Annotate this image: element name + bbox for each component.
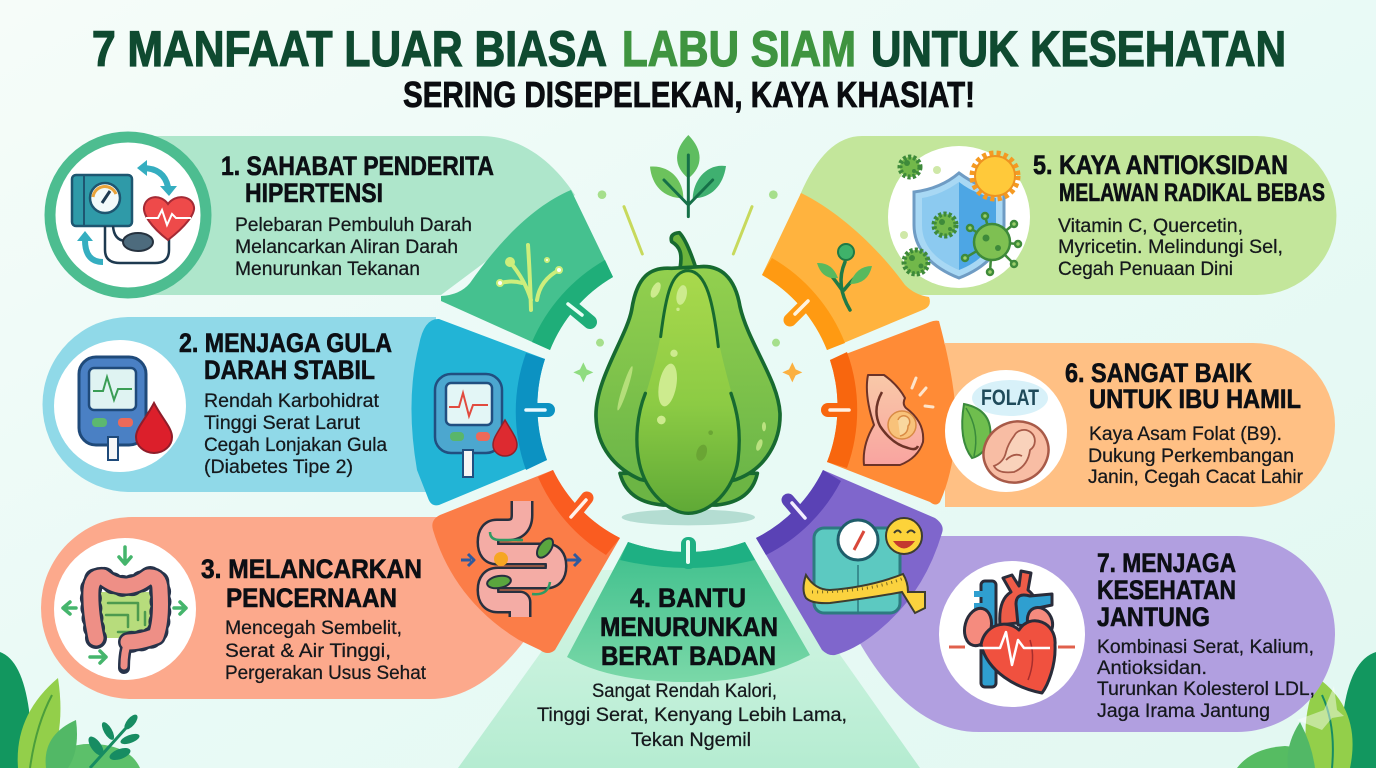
- icon: glucose meter: [79, 357, 172, 460]
- icon: scale and tape: [804, 518, 925, 613]
- body 6: [1088, 424, 1304, 488]
- heading 4: MENURUNKAN: [600, 612, 778, 642]
- panel 2: gula darah: [43, 317, 548, 505]
- body 6: Dukung Perkembangan: [1088, 446, 1294, 467]
- tab: [828, 403, 849, 417]
- pill: [43, 317, 436, 492]
- tab: [790, 301, 808, 320]
- heading 6: 6. SANGAT BAIK: [1065, 358, 1252, 388]
- heading 1: HIPERTENSI: [245, 178, 383, 208]
- body 5: Myricetin. Melindungi Sel,: [1058, 237, 1283, 258]
- icon circle: [54, 340, 186, 472]
- heading 6: [1065, 358, 1301, 414]
- body 7: Jaga Irama Jantung: [1097, 701, 1270, 722]
- icon: sprout with berry: [817, 244, 872, 310]
- heading 1: 1. SAHABAT PENDERITA: [221, 151, 494, 181]
- tab: [526, 403, 548, 417]
- icon: heart: [949, 571, 1075, 693]
- heading 3: PENCERNAAN: [226, 583, 397, 613]
- pill: [41, 517, 525, 699]
- central chayote illustration: [573, 135, 802, 525]
- icon: top sprig: [650, 135, 726, 217]
- icon: sprout: [497, 245, 562, 310]
- body 2: Cegah Lonjakan Gula: [204, 435, 387, 456]
- body 2: Tinggi Serat Larut: [204, 413, 361, 434]
- panel 4: bantu menurunkan berat badan: [458, 537, 920, 768]
- heading 3: 3. MELANCARKAN: [201, 554, 422, 584]
- body 3: Serat & Air Tinggi,: [225, 641, 391, 662]
- body 1: [235, 215, 472, 280]
- wedge: [441, 190, 613, 350]
- title: 7 MANFAAT LUAR BIASA: [92, 21, 607, 77]
- heading 3: [201, 554, 422, 613]
- icon circle: [50, 137, 206, 293]
- wedge band: [827, 352, 857, 468]
- body 1: Melancarkan Aliran Darah: [235, 237, 458, 258]
- heading 2: [179, 328, 392, 385]
- icon: intestine: [461, 501, 580, 617]
- tab: [681, 537, 696, 569]
- heading 7: KESEHATAN: [1097, 575, 1236, 605]
- icon circle: [939, 561, 1085, 707]
- wedge band: [762, 258, 845, 350]
- body 3: Mencegah Sembelit,: [225, 618, 402, 639]
- tab: [571, 498, 587, 517]
- body 3: Pergerakan Usus Sehat: [225, 663, 427, 684]
- body 4: Tinggi Serat, Kenyang Lebih Lama,: [537, 705, 847, 726]
- icon: blood pressure monitor: [72, 160, 194, 263]
- pill: [49, 136, 575, 295]
- bottom right foliage: [1237, 652, 1376, 768]
- decorative rays, dots and stars: [573, 190, 802, 382]
- tab: [568, 304, 590, 322]
- heading 4: 4. BANTU: [630, 583, 746, 613]
- wedge: [762, 193, 930, 350]
- body 7: Antioksidan.: [1097, 658, 1207, 679]
- body 5: Cegah Penuaan Dini: [1058, 259, 1233, 280]
- body 5: Vitamin C, Quercetin,: [1058, 216, 1243, 237]
- dark band: [620, 542, 755, 568]
- ground shadow: [622, 509, 755, 525]
- body 7: Turunkan Kolesterol LDL,: [1097, 679, 1315, 700]
- body 4: Tekan Ngemil: [631, 730, 751, 751]
- body 4: [537, 681, 847, 751]
- icon: colon: [63, 547, 186, 668]
- wedge: [756, 470, 943, 655]
- icon: folat fetus: [962, 380, 1059, 493]
- icon: small glucose meter: [435, 374, 517, 477]
- subtitle: SERING DISEPELEKAN, KAYA KHASIAT!: [403, 74, 975, 115]
- body 6: Kaya Asam Folat (B9).: [1089, 424, 1282, 445]
- chayote fruit: [596, 233, 780, 513]
- heading 1: [221, 151, 494, 208]
- body 1: Pelebaran Pembuluh Darah: [235, 215, 472, 236]
- pill: [858, 536, 1335, 732]
- wedge: [411, 319, 547, 505]
- body 2: Rendah Karbohidrat: [204, 391, 380, 412]
- heading 7: JANTUNG: [1097, 602, 1210, 632]
- bottom left foliage: [0, 652, 141, 768]
- tab: [788, 500, 805, 518]
- body 2: (Diabetes Tipe 2): [204, 457, 353, 478]
- panel 7: jantung: [756, 470, 1335, 732]
- body 2: [204, 391, 387, 478]
- body 7: Kombinasi Serat, Kalium,: [1097, 637, 1314, 658]
- heading 5: [1033, 150, 1325, 207]
- panel 3: pencernaan: [41, 470, 620, 699]
- heading 7: 7. MENJAGA: [1097, 548, 1236, 578]
- body 4: Sangat Rendah Kalori,: [592, 681, 777, 702]
- heading 6: UNTUK IBU HAMIL: [1089, 384, 1301, 414]
- icon circle: [945, 370, 1067, 492]
- wedge: [827, 321, 956, 504]
- trapezoid background: [458, 570, 920, 768]
- icon: folat fetus: FOLAT: [981, 385, 1039, 410]
- title highlight: labu siam: LABU SIAM: [622, 21, 856, 77]
- body 7: [1097, 637, 1315, 722]
- icon: pregnant woman: [864, 375, 933, 465]
- heading 2: 2. MENJAGA GULA: [179, 328, 392, 358]
- heading 4: BERAT BADAN: [601, 641, 776, 671]
- wedge band: [532, 260, 613, 350]
- pill: [800, 136, 1336, 295]
- body 6: Janin, Cegah Cacat Lahir: [1088, 467, 1304, 488]
- wedge: [432, 470, 620, 653]
- panel 6: ibu hamil: [827, 321, 1335, 507]
- wedge band: [538, 470, 620, 555]
- icon circle: [54, 538, 196, 680]
- heading 7: [1097, 548, 1236, 632]
- icon circle: [888, 146, 1030, 288]
- title end: UNTUK KESEHATAN: [871, 21, 1286, 77]
- body 3: [225, 618, 427, 684]
- heading 5: 5. KAYA ANTIOKSIDAN: [1033, 150, 1288, 180]
- wedge band: [516, 353, 547, 470]
- pill: [945, 343, 1335, 507]
- panel 1: hipertensi: [49, 136, 613, 350]
- body 5: [1058, 216, 1283, 280]
- heading 4: [600, 583, 778, 671]
- green heading pad: [567, 542, 810, 682]
- heading 2: DARAH STABIL: [204, 355, 375, 385]
- wedge band: [756, 470, 841, 555]
- panel 5: antioksidan: [762, 136, 1336, 350]
- icon: shield and viruses: [900, 154, 1021, 278]
- body 1: Menurunkan Tekanan: [235, 259, 420, 280]
